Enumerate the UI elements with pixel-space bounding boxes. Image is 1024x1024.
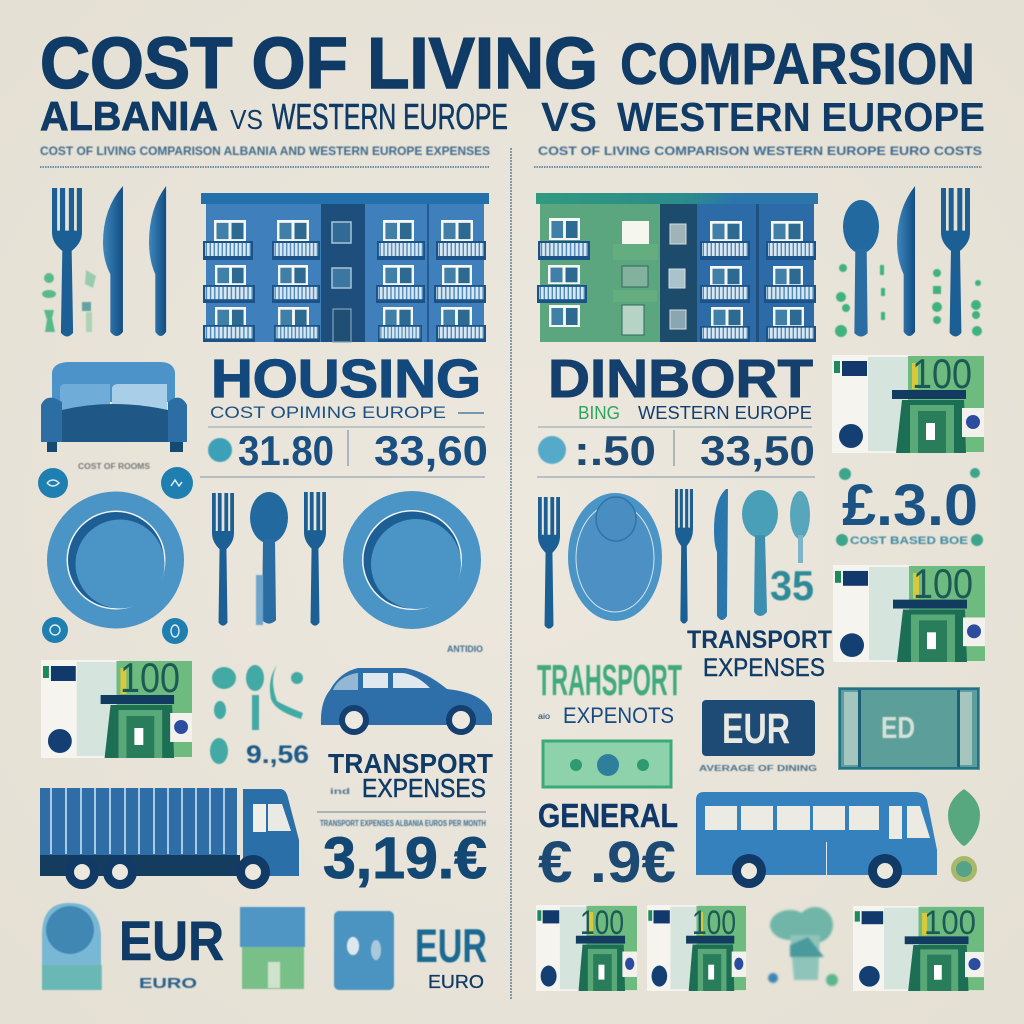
caption: COST OF ROOMS <box>78 462 151 471</box>
icons: teal dots around total <box>836 468 983 546</box>
icon: blurred tree <box>768 907 838 986</box>
icons: lower coins <box>42 617 188 644</box>
subtitle: WESTERN EUROPE <box>272 96 508 137</box>
banknote: bottom row: 100 <box>580 904 624 942</box>
panel: Western Europe <box>536 186 985 991</box>
caption: transport detail: TRANSPORT EXPENSES ALBANIA EUROS PER MONTH <box>320 819 486 828</box>
heading: transport expenses: TRANSPORT <box>687 626 832 654</box>
text: housing caption: COST OPIMING EUROPE <box>210 403 446 422</box>
heading: transport expenses <box>687 626 832 682</box>
banknote: bottom row: 100 <box>924 904 976 942</box>
icons: small coins <box>38 467 193 499</box>
subtitle: VS <box>230 104 263 135</box>
banknote: 100 <box>120 654 180 701</box>
icon: seal <box>538 436 566 464</box>
building: blue apartments <box>201 193 489 342</box>
banknote: upper <box>832 350 984 453</box>
value: small amount: 9.,56 <box>246 741 309 769</box>
banknote <box>41 654 192 758</box>
text: expenots: aio <box>538 712 551 721</box>
value: dining total: £.3.0 <box>842 473 978 538</box>
banknote: bottom row: 100 <box>692 904 736 942</box>
badge: EUR <box>702 700 815 756</box>
text: expenots: EXPENOTS <box>563 703 674 728</box>
value: dining right: 33,50 <box>700 427 815 474</box>
text: dining caption: WESTERN EUROPE <box>638 403 812 423</box>
subtitle: WESTERN EUROPE <box>617 94 985 140</box>
value: housing right: 33,60 <box>374 427 488 474</box>
icon: fork and knives <box>52 186 166 336</box>
caption: dining total: COST BASED BOE <box>850 535 968 547</box>
heading: transport expenses <box>328 748 493 803</box>
badge: EUR: EUR <box>722 705 790 753</box>
building: green and blue apartments <box>536 193 818 342</box>
subtitle <box>40 93 985 140</box>
heading: general: GENERAL <box>538 797 678 834</box>
icon: note panel <box>240 907 305 989</box>
icon: seal <box>208 438 232 462</box>
title <box>40 24 975 104</box>
heading: transport expenses: ind <box>330 787 350 796</box>
label: EUR: EUR <box>119 909 224 972</box>
banknote: upper: 100 <box>912 350 972 397</box>
heading: housing: HOUSING <box>211 349 481 409</box>
blurred caption left: COST OF LIVING COMPARISON ALBANIA AND WESTERN EUROPE EXPENSES <box>40 144 490 158</box>
icon: right plate <box>343 491 481 629</box>
subtitle: ALBANIA <box>40 93 218 139</box>
value: general: € .9€ <box>538 830 676 895</box>
subtitle: VS <box>541 94 597 140</box>
banknote: small dollar <box>543 741 671 787</box>
label: EURO: EURO <box>139 975 197 992</box>
banknote: green frame: ED <box>881 710 915 745</box>
icon: car <box>321 668 492 735</box>
value: small amount: 35 <box>770 562 814 609</box>
label: second EURO: EURO <box>428 972 484 992</box>
icon: green marks <box>835 264 982 337</box>
banknote: lower <box>833 560 985 662</box>
value: transport: 3,19.€ <box>323 826 487 891</box>
title: COST OF LIVING <box>40 24 598 104</box>
icon: blue document <box>334 911 394 990</box>
title: COMPARSION <box>620 32 975 97</box>
value: housing left: 31.80 <box>238 427 334 474</box>
icon: truck <box>40 788 299 889</box>
heading: dinbort: DINBORT <box>548 349 813 409</box>
heading: transport expenses: EXPENSES <box>703 654 825 682</box>
banknote: lower: 100 <box>913 560 973 607</box>
icon: left plate <box>47 492 184 628</box>
value: dining left: :.50 <box>574 427 656 474</box>
heading: transport expenses: EXPENSES <box>362 773 486 803</box>
panel: Albania <box>38 186 493 992</box>
text: dining caption: BING <box>578 403 620 423</box>
icon: coin pouch <box>42 903 102 990</box>
icon: dining set <box>538 489 810 629</box>
caption: small plate note: ANTIDIO <box>447 644 483 654</box>
icon: green leaf and coin <box>948 789 980 882</box>
icon: spoon knife fork <box>843 186 970 337</box>
icon: sofa <box>41 362 187 452</box>
heading: transport expenses: TRANSPORT <box>328 748 493 779</box>
banknote: bottom row <box>536 904 984 991</box>
icon: bus <box>696 792 937 888</box>
banknote: green frame <box>838 687 980 770</box>
blurred caption right: COST OF LIVING COMPARISON WESTERN EUROPE EURO COSTS <box>538 144 982 158</box>
icon: abstract green marks <box>210 665 303 764</box>
icon: dining set <box>212 492 326 626</box>
caption: EUR detail: AVERAGE OF DINING <box>699 764 817 773</box>
icon: green marks <box>42 270 96 332</box>
heading: green transport: TRAHSPORT <box>537 656 682 705</box>
label: second EUR: EUR <box>415 919 487 972</box>
